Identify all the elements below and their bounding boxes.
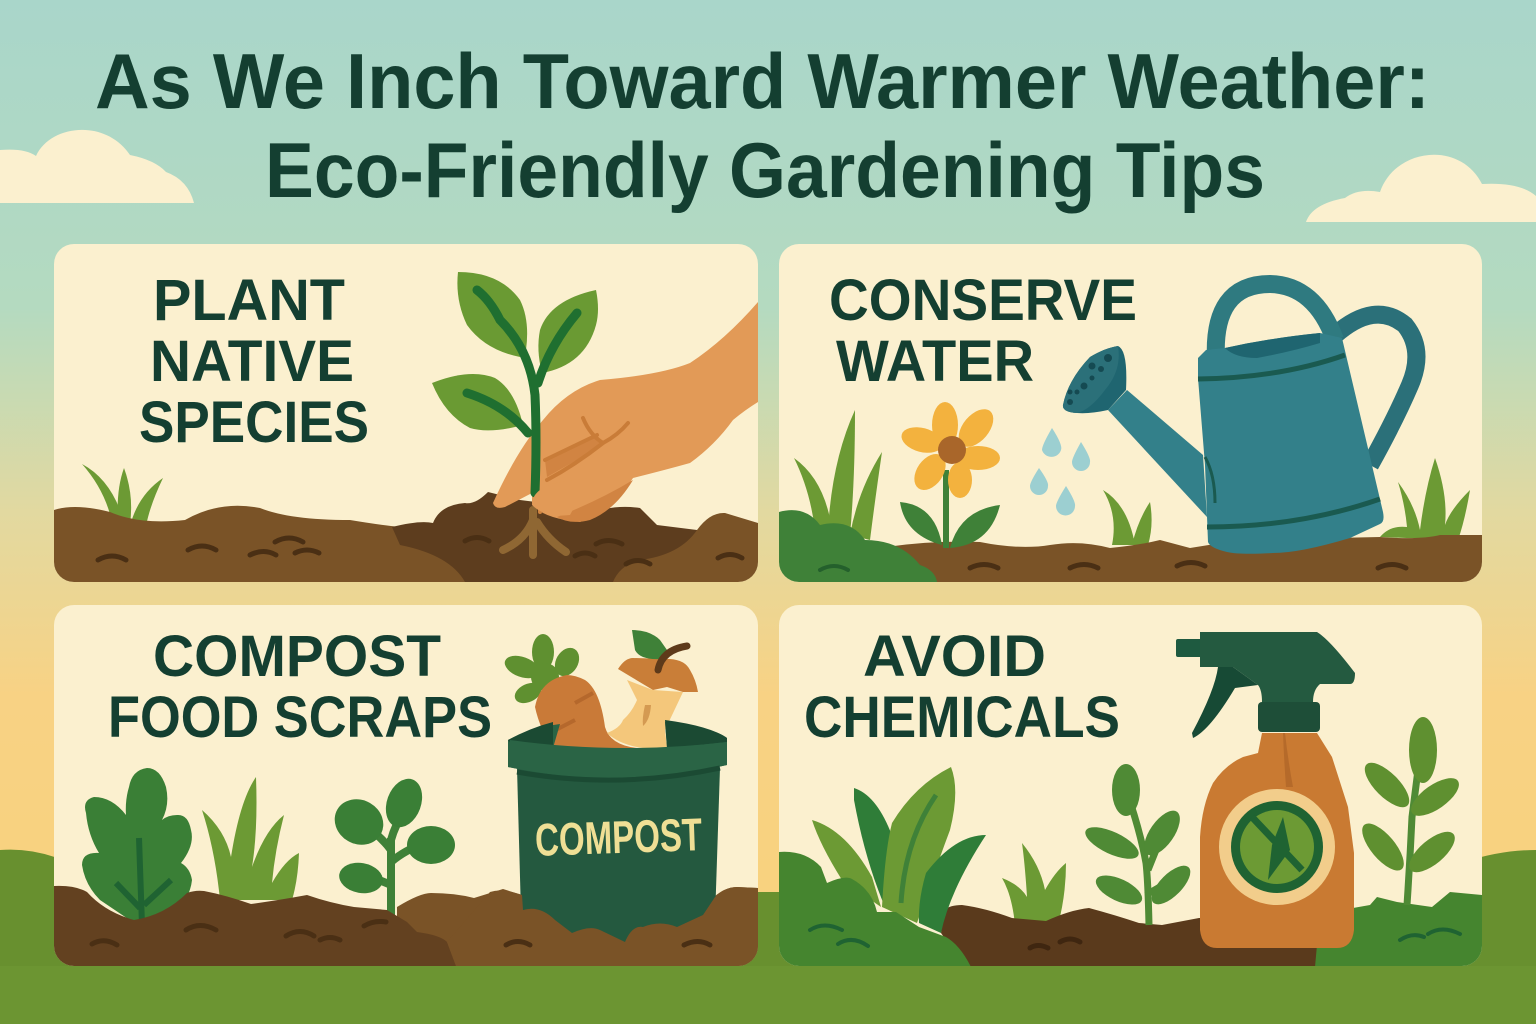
heading: conserve water xyxy=(831,279,1135,381)
icon: hand xyxy=(493,302,758,522)
heading: plant native species: SPECIES xyxy=(139,390,369,455)
heading: plant native species: NATIVE xyxy=(150,329,354,394)
title: Eco-Friendly Gardening Tips xyxy=(265,126,1265,214)
heading: plant native species: PLANT xyxy=(153,268,345,333)
soil xyxy=(941,905,1320,967)
heading: compost food scraps: COMPOST xyxy=(153,624,441,689)
title xyxy=(95,37,1430,214)
icon: roots xyxy=(503,510,566,555)
panel: conserve water xyxy=(779,244,1482,582)
icon: sprig right xyxy=(1355,717,1465,905)
heading: avoid chemicals: CHEMICALS xyxy=(804,685,1120,750)
ground hills xyxy=(0,850,1536,1024)
soil clods xyxy=(970,562,1406,568)
icon: thumb over stem xyxy=(532,488,572,516)
icon: broad-leaf plant xyxy=(812,767,986,933)
heading: conserve water: CONSERVE xyxy=(829,268,1137,333)
icon: small grass xyxy=(1002,843,1066,925)
icon: seedling stem xyxy=(467,290,577,493)
soil dark xyxy=(54,886,456,966)
soil in front of bin xyxy=(447,887,758,966)
soil clods xyxy=(90,919,388,948)
bush right xyxy=(1315,892,1482,967)
cloud left xyxy=(0,130,194,203)
soil clods xyxy=(98,538,742,564)
dark soil mound xyxy=(392,492,697,582)
soil light xyxy=(397,887,758,966)
heading: avoid chemicals xyxy=(806,635,1118,738)
icon: spray bottle xyxy=(1176,632,1355,948)
icon: seedling leaves xyxy=(432,272,598,430)
icon: leafy plant xyxy=(82,768,192,925)
heading: compost food scraps: FOOD SCRAPS xyxy=(108,685,492,750)
cloud right xyxy=(1306,155,1536,222)
icon: water drops xyxy=(1030,428,1090,516)
panel: avoid chemicals xyxy=(779,605,1482,967)
grass xyxy=(794,410,1470,545)
icon: carrot and apple core xyxy=(502,630,698,748)
heading: compost food scraps xyxy=(112,635,490,738)
heading: conserve water: WATER xyxy=(836,329,1034,394)
soil xyxy=(880,535,1482,582)
icon: watering can xyxy=(1063,284,1416,554)
bushes xyxy=(779,510,937,582)
icon: sprig middle xyxy=(1081,764,1196,925)
icon: flower xyxy=(899,402,1000,548)
compost label: COMPOST xyxy=(534,808,703,866)
heading: plant native species xyxy=(140,280,367,442)
icon: seedling xyxy=(334,778,455,915)
soil clods xyxy=(1030,939,1080,948)
icon: grass xyxy=(202,777,299,900)
icon: grass tuft xyxy=(82,464,163,526)
title: As We Inch Toward Warmer Weather: xyxy=(95,37,1430,125)
icon: compost bin xyxy=(508,720,727,950)
panel: plant native species xyxy=(54,244,758,582)
soil xyxy=(54,506,758,582)
bush left xyxy=(779,852,971,967)
heading: avoid chemicals: AVOID xyxy=(863,624,1046,689)
panel: compost food scraps xyxy=(54,605,758,966)
